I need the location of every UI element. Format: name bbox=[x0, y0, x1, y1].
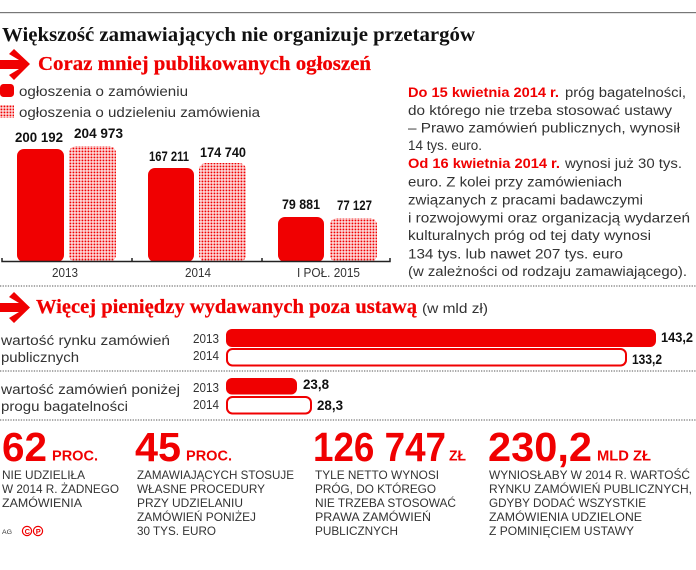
stat: 230,2 mld zł bbox=[488, 424, 692, 538]
stat: 126 747 zł: ZŁ bbox=[449, 448, 466, 464]
stat: 126 747 zł bbox=[313, 424, 466, 538]
text block: threshold explanation: Od 16 kwietnia 2014 r. bbox=[408, 156, 560, 172]
stat: 62 percent: NIE UDZIELIŁA bbox=[2, 468, 85, 482]
stat: 45 percent: WŁASNE PROCEDURY bbox=[137, 482, 265, 496]
bar chart: value below threshold: 28,3 bbox=[317, 397, 343, 413]
stat: 126 747 zł: TYLE NETTO WYNOSI bbox=[315, 468, 439, 482]
legend: ogłoszenia o zamówieniu bbox=[19, 84, 188, 100]
text block: threshold explanation: do którego nie trzeba stosować ustawy bbox=[408, 103, 673, 119]
stat: 45 percent: ZAMAWIAJĄCYCH STOSUJE bbox=[137, 468, 294, 482]
title: Większość zamawiających nie organizuje przetargów bbox=[2, 24, 475, 46]
credit and copyright icons: AG bbox=[2, 529, 12, 536]
icon: arrow bbox=[0, 292, 30, 323]
bar chart: value below threshold: 23,8 bbox=[303, 376, 329, 392]
stat: 45 percent: 30 TYS. EURO bbox=[137, 524, 216, 538]
stat: 230,2 mld zł: GDYBY DODAĆ WSZYSTKIE bbox=[489, 495, 646, 510]
bar chart: public procurement market value bbox=[0, 329, 693, 367]
icon: arrow bbox=[0, 49, 30, 80]
text block: threshold explanation: próg bagatelności, bbox=[565, 85, 686, 101]
panel: spending outside the law bbox=[0, 292, 696, 415]
stat: 45 percent: ZAMÓWIEŃ PONIŻEJ bbox=[137, 509, 256, 524]
text block: threshold explanation: (w zależności od rodzaju zamawiającego). bbox=[408, 264, 687, 280]
stat: 126 747 zł: 126 747 bbox=[313, 424, 446, 470]
bar chart: announcements: I POŁ. 2015 bbox=[297, 266, 360, 280]
bar chart: public procurement market value: 133,2 bbox=[632, 351, 662, 367]
legend bbox=[0, 84, 260, 121]
text block: threshold explanation: 14 tys. euro. bbox=[408, 138, 482, 154]
text block: threshold explanation: 134 tys. lub nawet 207 tys. euro bbox=[408, 246, 623, 262]
stat: 62 percent: 62 bbox=[2, 424, 47, 470]
stat: 45 percent: PROC. bbox=[186, 448, 232, 464]
bar chart: value below threshold: 2013 bbox=[193, 381, 219, 395]
stat: 230,2 mld zł: 230,2 bbox=[488, 424, 592, 470]
stat: 230,2 mld zł: MLD ZŁ bbox=[597, 448, 651, 464]
stat: 126 747 zł: PUBLICZNYCH bbox=[315, 524, 398, 538]
bar chart: public procurement market value: wartość rynku zamówień bbox=[0, 333, 170, 349]
stat: 45 percent bbox=[135, 424, 294, 538]
bar chart: announcements: 79 881 bbox=[282, 196, 320, 212]
stat: 126 747 zł: NIE TRZEBA STOSOWAĆ bbox=[315, 495, 456, 510]
text block: threshold explanation: związanych z pracami badawczymi bbox=[408, 192, 643, 208]
stat: 62 percent: ZAMÓWIENIA bbox=[2, 495, 82, 510]
bar chart: value below threshold bbox=[0, 376, 343, 415]
bar chart: announcements: 204 973 bbox=[74, 125, 123, 141]
stat: 45 percent: PRZY UDZIELANIU bbox=[137, 496, 243, 510]
stat: 62 percent: W 2014 R. ŻADNEGO bbox=[2, 482, 119, 496]
credit and copyright icons: P bbox=[36, 527, 41, 536]
credit and copyright icons bbox=[2, 526, 43, 536]
text block: threshold explanation: euro. Z kolei przy zamówieniach bbox=[408, 174, 622, 190]
stat: 126 747 zł: PRAWA ZAMÓWIEŃ bbox=[315, 509, 431, 524]
stat: 230,2 mld zł: WYNIOSŁABY W 2014 R. WARTOŚĆ bbox=[489, 467, 690, 482]
bar chart: public procurement market value: publicznych bbox=[1, 350, 79, 366]
legend: ogłoszenia o udzieleniu zamówienia bbox=[19, 105, 260, 121]
stat: 230,2 mld zł: Z POMINIĘCIEM USTAWY bbox=[489, 524, 634, 538]
bar chart: public procurement market value: 2013 bbox=[193, 332, 219, 346]
text block: threshold explanation: i rozwojowymi oraz organizacją wydarzeń bbox=[408, 210, 690, 226]
stat: 62 percent: PROC. bbox=[52, 448, 98, 464]
bar chart: value below threshold: wartość zamówień poniżej bbox=[0, 382, 180, 398]
text block: threshold explanation: kulturalnych próg od tej daty wynosi bbox=[408, 228, 651, 244]
bar chart: public procurement market value: 143,2 bbox=[661, 329, 693, 345]
text block: threshold explanation bbox=[408, 85, 690, 280]
stat: 62 percent bbox=[2, 424, 119, 510]
bar chart: announcements: 200 192 bbox=[15, 129, 63, 145]
stat: 230,2 mld zł: ZAMÓWIENIA UDZIELONE bbox=[489, 509, 642, 524]
bar chart: announcements: 77 127 bbox=[337, 197, 372, 213]
bar chart: public procurement market value: 2014 bbox=[193, 349, 219, 363]
bar chart: announcements: 2014 bbox=[185, 266, 211, 280]
text block: threshold explanation: Do 15 kwietnia 2014 r. bbox=[408, 85, 559, 101]
stat: 126 747 zł: PRÓG, DO KTÓREGO bbox=[315, 481, 436, 496]
credit and copyright icons: C bbox=[25, 527, 31, 536]
heading: announcements: Coraz mniej publikowanych ogłoszeń bbox=[38, 53, 372, 75]
bar chart: announcements: 174 740 bbox=[200, 144, 246, 160]
bar chart: announcements bbox=[2, 125, 390, 280]
text block: threshold explanation: wynosi już 30 tys. bbox=[564, 156, 682, 172]
bar chart: announcements: 2013 bbox=[52, 266, 78, 280]
bar chart: announcements: 167 211 bbox=[149, 148, 189, 164]
bar chart: value below threshold: progu bagatelności bbox=[1, 399, 128, 415]
heading: spending: Więcej pieniędzy wydawanych poza ustawą bbox=[36, 296, 417, 318]
stat: 45 percent: 45 bbox=[135, 424, 181, 470]
panel: announcements bbox=[0, 49, 390, 280]
stat: 230,2 mld zł: RYNKU ZAMÓWIEŃ PUBLICZNYCH, bbox=[489, 481, 692, 496]
unit note: (w mld zł) bbox=[422, 301, 488, 317]
text block: threshold explanation: – Prawo zamówień publicznych, wynosił bbox=[408, 120, 681, 136]
bar chart: value below threshold: 2014 bbox=[193, 398, 219, 412]
